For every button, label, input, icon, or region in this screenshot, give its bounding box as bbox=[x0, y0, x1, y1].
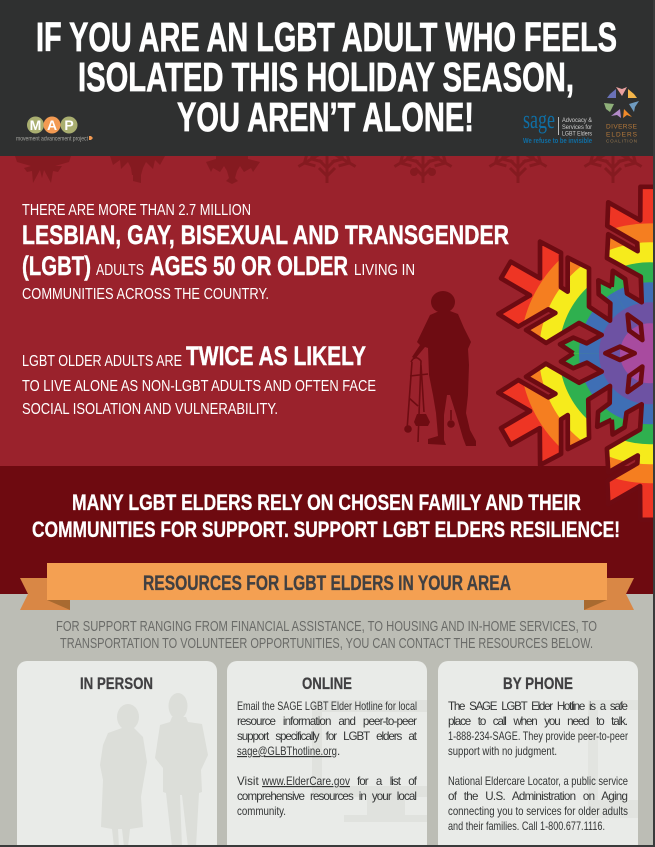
title: YOU AREN’T ALONE! bbox=[177, 94, 474, 140]
text block: online resources bbox=[237, 700, 418, 818]
icon: older couple silhouette bbox=[100, 693, 208, 847]
logo: SAGE: We refuse to be invisible bbox=[523, 136, 592, 145]
panel: in person: IN PERSON bbox=[80, 674, 153, 693]
callout: chosen family bbox=[32, 490, 620, 542]
text block: online resources: comprehensive resources in your local bbox=[237, 790, 417, 803]
text block: phone resources: of the U.S. Administration on Aging bbox=[448, 790, 628, 803]
text block: statistics: ADULTS bbox=[96, 262, 144, 279]
text block: twice as likely: TWICE AS LIKELY bbox=[186, 341, 366, 371]
logo: Diverse Elders Coalition: DIVERSE bbox=[606, 124, 638, 130]
text block: online resources: Visit bbox=[237, 775, 259, 788]
heading ribbon: resources: RESOURCES FOR LGBT ELDERS IN YOUR AREA bbox=[143, 572, 511, 595]
text block: twice as likely: TO LIVE ALONE AS NON-LGBT ADULTS AND OFTEN FACE bbox=[22, 378, 376, 395]
text block: twice as likely: SOCIAL ISOLATION AND VULNERABILITY. bbox=[22, 401, 278, 418]
text block: twice as likely: LGBT OLDER ADULTS ARE bbox=[22, 353, 182, 370]
text block: phone resources bbox=[448, 700, 628, 833]
logo: SAGE: Advocacy & bbox=[562, 117, 593, 124]
panel: red background bbox=[0, 156, 655, 466]
text block: twice as likely bbox=[22, 341, 376, 418]
logo: SAGE: LGBT Elders bbox=[562, 130, 593, 138]
text block: phone resources: and their families. Call 1-800.677.1116. bbox=[448, 820, 605, 833]
text block: statistics: LIVING IN bbox=[354, 262, 415, 279]
text block: phone resources: place to call when you need to talk. bbox=[448, 715, 628, 728]
panel: dark red band bbox=[0, 466, 655, 594]
panel: online bbox=[227, 661, 427, 847]
panel: by phone bbox=[438, 661, 638, 847]
decorative snowflake row bbox=[15, 143, 646, 184]
text block: statistics: AGES 50 OR OLDER bbox=[150, 251, 348, 281]
panel: online: ONLINE bbox=[302, 674, 352, 693]
text block: online resources: community. bbox=[237, 805, 286, 818]
text block: online resources: resource information and peer-to-peer bbox=[237, 715, 417, 728]
logo: SAGE: sage bbox=[523, 105, 555, 134]
text block: online resources: www.ElderCare.gov bbox=[261, 775, 350, 788]
logo: MAP: movement advancement project bbox=[16, 136, 88, 142]
text block: statistics: (LGBT) bbox=[22, 251, 91, 281]
panel: grey resources background bbox=[0, 594, 655, 847]
panel: header bbox=[0, 0, 655, 156]
text block: online resources: Email the SAGE LGBT Elder Hotline for local bbox=[237, 700, 417, 713]
text block: online resources: sage@GLBThotline.org bbox=[237, 745, 337, 758]
title bbox=[36, 14, 617, 140]
panel: in person bbox=[17, 661, 217, 847]
heading ribbon: resources bbox=[20, 563, 634, 610]
text block: online resources: support specifically for LGBT elders at bbox=[237, 730, 418, 743]
text block: statistics bbox=[22, 202, 509, 303]
logo: SAGE: Services for bbox=[562, 124, 593, 131]
text block: resources intro bbox=[56, 619, 597, 652]
logo: MAP bbox=[16, 116, 93, 142]
logo: Diverse Elders Coalition: COALITION bbox=[606, 138, 637, 144]
logo: SAGE bbox=[523, 105, 593, 145]
logo: Diverse Elders Coalition: ELDERS bbox=[606, 132, 638, 138]
logo: MAP: M bbox=[30, 117, 41, 133]
logo: MAP: P bbox=[64, 117, 74, 133]
icon: elder with walker silhouette bbox=[404, 291, 476, 446]
text block: phone resources: support with no judgment. bbox=[448, 745, 557, 758]
text block: statistics: THERE ARE MORE THAN 2.7 MILLION bbox=[22, 202, 251, 219]
text block: statistics: COMMUNITIES ACROSS THE COUNTRY. bbox=[22, 286, 269, 303]
icon: rainbow snowflake bbox=[496, 184, 653, 518]
logo: MAP: A bbox=[47, 117, 57, 133]
text block: statistics: LESBIAN, GAY, BISEXUAL AND TRANSGENDER bbox=[22, 220, 509, 250]
logo: Diverse Elders Coalition bbox=[604, 87, 639, 144]
text block: online resources: . bbox=[337, 745, 340, 758]
text block: online resources: for a list of bbox=[357, 775, 418, 788]
panel: by phone: BY PHONE bbox=[503, 674, 573, 693]
text block: phone resources: The SAGE LGBT Elder Hotline is a safe bbox=[448, 700, 628, 713]
